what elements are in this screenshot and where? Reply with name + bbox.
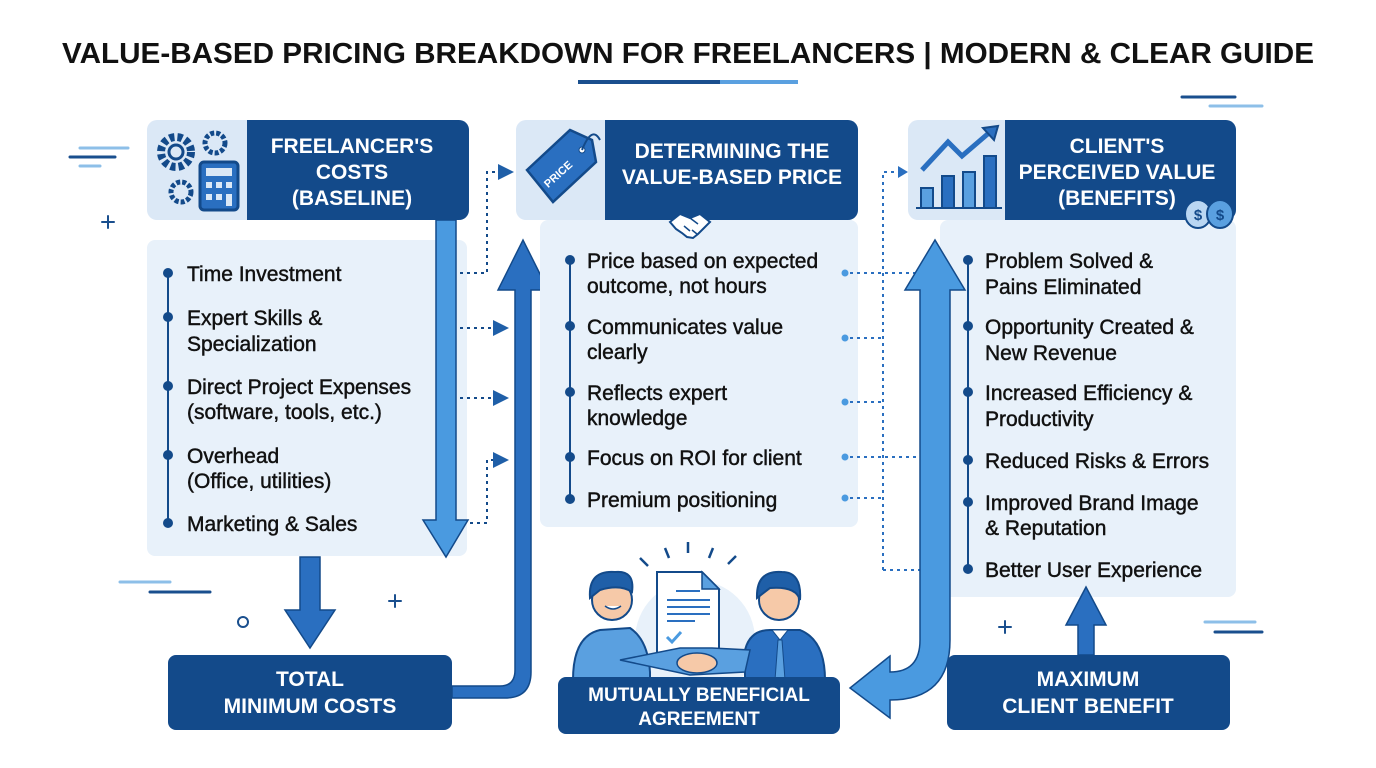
bullet list: benefits: Increased Efficiency &	[985, 382, 1192, 405]
box: total minimum costs	[168, 655, 452, 730]
dotted connectors: price to benefits	[842, 166, 920, 570]
bullet list: costs: Specialization	[187, 333, 317, 356]
bullet list: price: Premium positioning	[587, 489, 777, 512]
arrow: costs down	[423, 220, 468, 557]
box: total minimum costs: MINIMUM COSTS	[224, 695, 396, 718]
icon: price tag: PRICE	[542, 159, 575, 190]
box: mutually beneficial agreement: AGREEMENT	[638, 709, 760, 730]
arrow: up to price	[452, 240, 548, 698]
arrow: benefits up and back to agreement	[850, 240, 965, 718]
bullet list: price: outcome, not hours	[587, 275, 767, 298]
icon: money bags: $	[1216, 207, 1225, 224]
bullet list: benefits: Productivity	[985, 408, 1094, 431]
header: client perceived value: PERCEIVED VALUE	[1019, 161, 1215, 184]
bullet list: costs: (Office, utilities)	[187, 470, 331, 493]
bullet list: price	[565, 250, 818, 512]
bullet list: benefits: New Revenue	[985, 342, 1117, 365]
box: mutually beneficial agreement: MUTUALLY BENEFICIAL	[588, 685, 810, 706]
bullet list: price: Communicates value	[587, 316, 783, 339]
bullet list: benefits	[963, 250, 1209, 582]
bullet list: costs: Direct Project Expenses	[187, 376, 411, 399]
illustration: handshake agreement	[573, 542, 825, 700]
bullet list: costs: (software, tools, etc.)	[187, 401, 382, 424]
box: maximum client benefit	[947, 655, 1230, 730]
bullet list: benefits: & Reputation	[985, 517, 1106, 540]
panel: value-based price	[516, 120, 858, 527]
title	[62, 38, 1314, 84]
bullet list: price: knowledge	[587, 407, 687, 430]
panel: client perceived value	[908, 120, 1236, 597]
bullet list: costs: Overhead	[187, 445, 279, 468]
left person	[573, 628, 650, 680]
bullet list: costs: Expert Skills &	[187, 307, 322, 330]
title: VALUE-BASED PRICING BREAKDOWN FOR FREELANCERS | MODERN & CLEAR GUIDE	[62, 38, 1314, 70]
icon: money bags	[1185, 200, 1233, 228]
icon: money bags: $	[1194, 207, 1203, 224]
icon: handshake	[670, 214, 710, 238]
header: client perceived value	[908, 120, 1236, 220]
icon: growth chart	[916, 126, 1002, 208]
bullet list: price: Reflects expert	[587, 382, 727, 405]
bullet list: benefits: Problem Solved &	[985, 250, 1153, 273]
box: mutually beneficial agreement	[558, 677, 840, 734]
header: value-based price: DETERMINING THE	[635, 140, 829, 163]
header: freelancer costs	[147, 120, 469, 220]
bullet list: benefits: Pains Eliminated	[985, 276, 1141, 299]
box: maximum client benefit: MAXIMUM	[1037, 668, 1139, 691]
right person	[745, 630, 825, 680]
bullet list: benefits: Reduced Risks & Errors	[985, 450, 1209, 473]
header: client perceived value: CLIENT'S	[1070, 135, 1164, 158]
bullet list: costs	[163, 263, 411, 536]
box: total minimum costs: TOTAL	[276, 668, 344, 691]
icon: price tag	[527, 130, 600, 202]
hands	[620, 648, 750, 675]
arrow: to total minimum costs	[285, 557, 335, 648]
box: maximum client benefit: CLIENT BENEFIT	[1002, 695, 1174, 718]
header: client perceived value: (BENEFITS)	[1058, 187, 1176, 210]
header: value-based price: VALUE-BASED PRICE	[622, 166, 842, 189]
arrow: up from max client benefit	[1066, 587, 1106, 655]
header: freelancer costs: COSTS	[316, 161, 388, 184]
bullet list: price: clearly	[587, 341, 648, 364]
bullet list: costs: Marketing & Sales	[187, 513, 357, 536]
icon: gears and calculator	[161, 133, 238, 210]
bullet list: benefits: Improved Brand Image	[985, 492, 1199, 515]
header: freelancer costs: FREELANCER'S	[271, 135, 433, 158]
header: freelancer costs: (BASELINE)	[292, 187, 412, 210]
bullet list: price: Price based on expected	[587, 250, 818, 273]
dotted connectors: costs to price	[460, 172, 510, 523]
panel: freelancer costs	[147, 120, 469, 556]
header: value-based price	[516, 120, 858, 220]
document	[657, 572, 719, 655]
bullet list: costs: Time Investment	[187, 263, 342, 286]
bullet list: benefits: Opportunity Created &	[985, 316, 1194, 339]
bullet list: price: Focus on ROI for client	[587, 447, 802, 470]
bullet list: benefits: Better User Experience	[985, 559, 1202, 582]
